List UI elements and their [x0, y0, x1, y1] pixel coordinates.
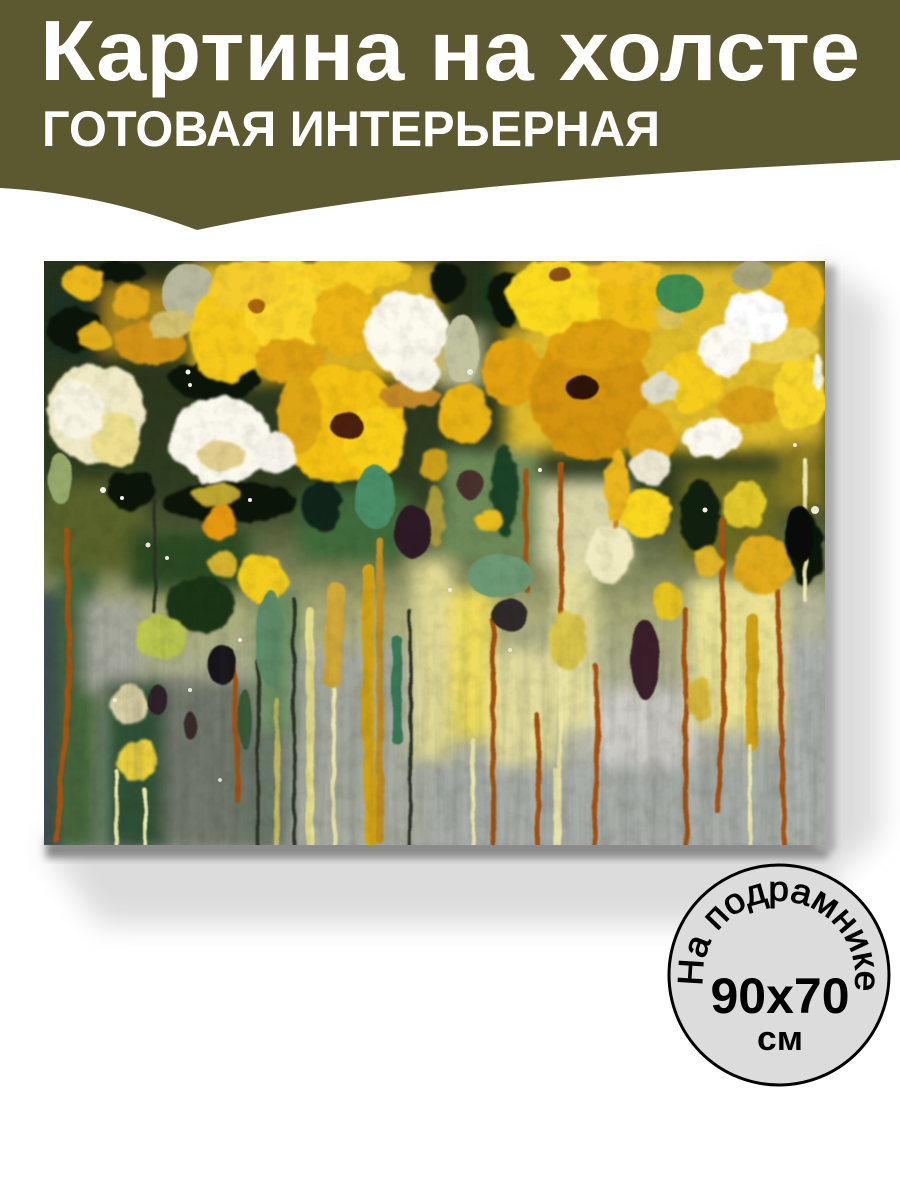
pale top patch: [162, 261, 772, 384]
size badge: [668, 864, 890, 1086]
header banner: [0, 0, 900, 230]
green accents: [48, 274, 704, 750]
title: Картина на холсте: [40, 4, 860, 99]
vertical streak texture: [84, 597, 825, 845]
flower centres and dark accents: [148, 268, 814, 739]
painting: abstract yellow and white flowers with drips: [30, 255, 835, 860]
yellow flowers: [62, 255, 827, 780]
badge curved label: На подрамнике: [678, 882, 875, 990]
painting background washes: [30, 261, 835, 860]
subtitle: ГОТОВАЯ ИНТЕРЬЕРНАЯ: [42, 101, 660, 157]
white flowers: [46, 292, 824, 583]
badge size: 90x70: [710, 968, 850, 1024]
drips: [56, 460, 805, 845]
badge unit: см: [757, 1020, 803, 1058]
paint splatter: [100, 369, 819, 782]
dark foliage: [47, 261, 823, 633]
mottled paint texture: [44, 261, 825, 845]
canvas drop shadow: [44, 265, 880, 925]
